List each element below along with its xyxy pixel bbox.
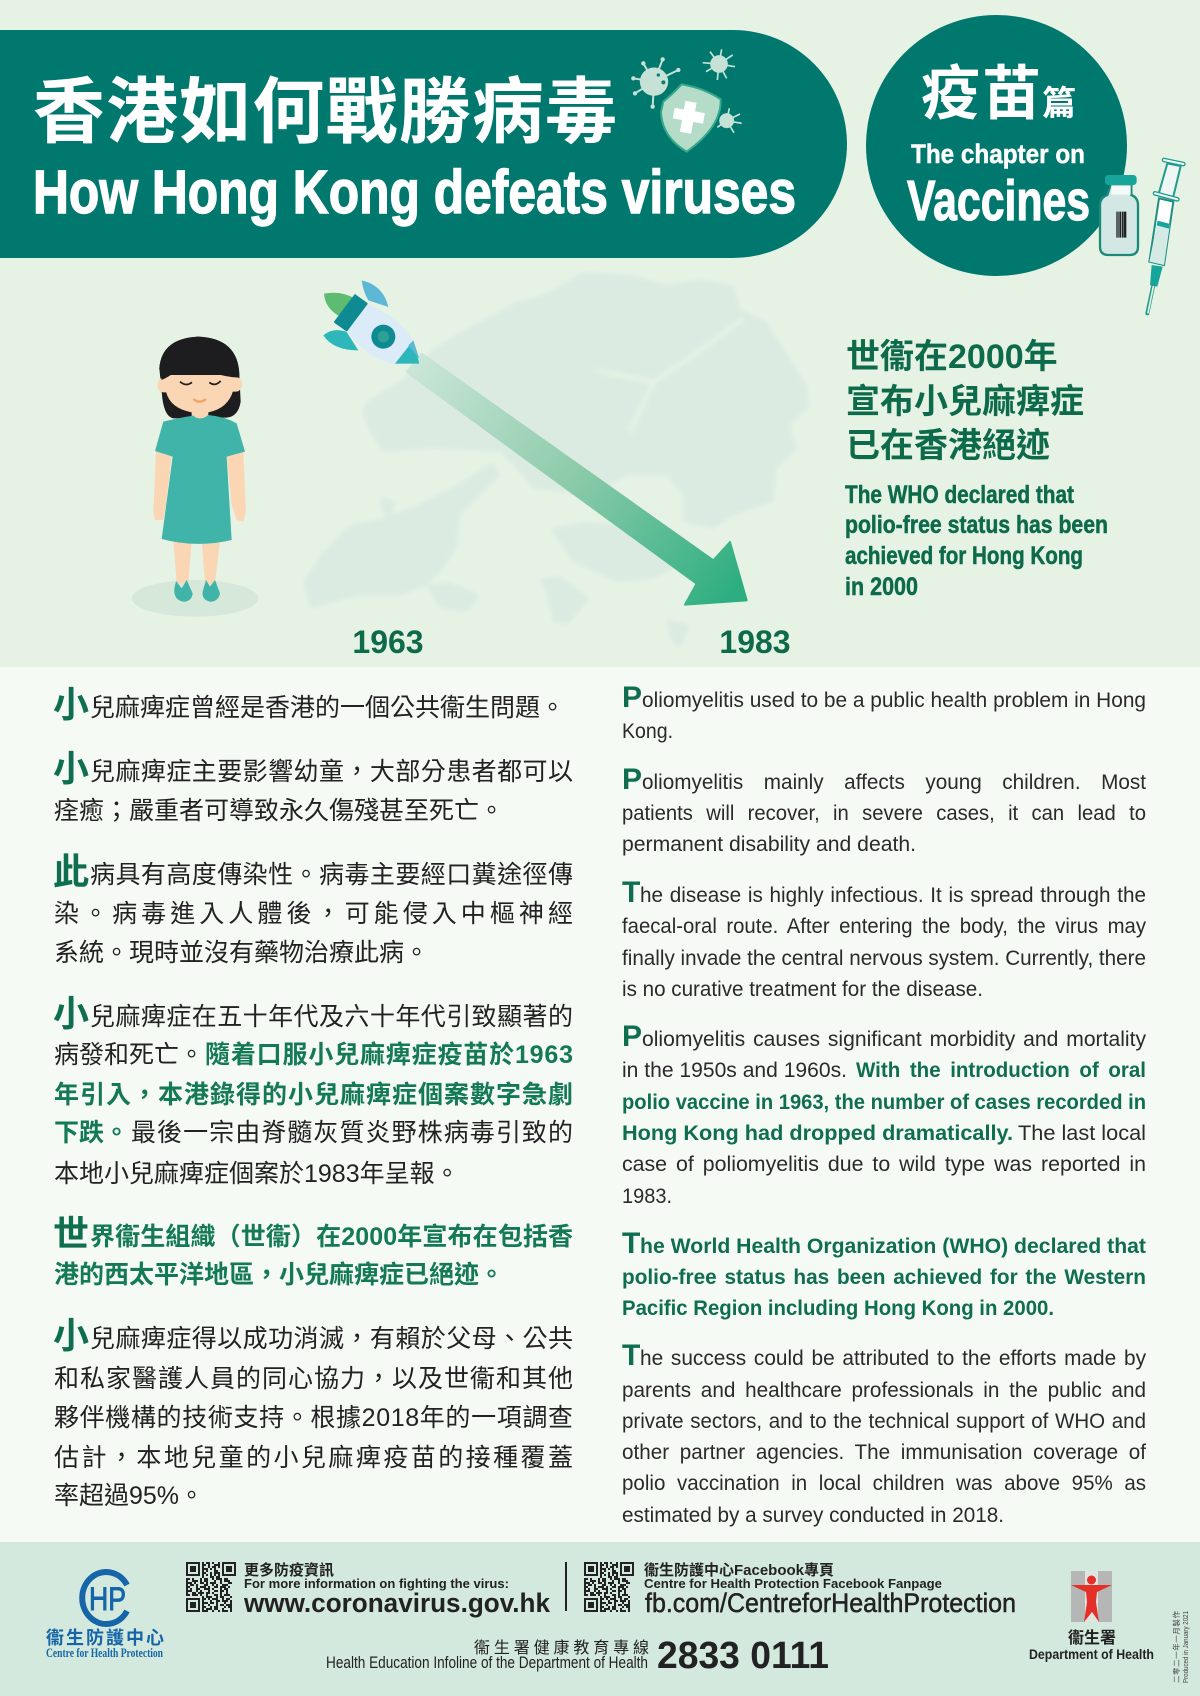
Facebook information: 衞生防護中心Facebook專頁 — [644, 1561, 834, 1579]
shoes — [174, 580, 220, 602]
paragraph 4: P — [622, 1020, 642, 1053]
logo: Centre for Health Protection: 衞生防護中心 — [46, 1627, 164, 1648]
paragraph 6: he success could be attributed to the efforts made by — [640, 1347, 1146, 1370]
paragraph 5: 世 — [53, 1213, 89, 1254]
paragraph 4: 1983. — [622, 1185, 672, 1208]
paragraph 3: 系統。現時並沒有藥物治療此病。 — [54, 939, 429, 967]
icon: rocket — [323, 280, 419, 365]
year label 1963: 1963 — [352, 624, 424, 660]
website information — [243, 1561, 551, 1618]
logo: Centre for Health Protection — [46, 1572, 164, 1660]
background: upper section — [0, 0, 1200, 667]
callout: polio-free declaration — [845, 338, 1108, 601]
Chinese text column — [53, 684, 573, 1510]
badge heading: vaccines in Chinese: 疫苗 — [921, 61, 1041, 127]
paragraph 3 — [622, 876, 1146, 1001]
health education infoline: 2833 0111 — [657, 1635, 829, 1677]
logo: Department of Health: Department of Health — [1029, 1647, 1154, 1662]
paragraph 4 — [53, 993, 573, 1188]
paragraph 6: parents and healthcare professionals in the public and — [622, 1379, 1146, 1402]
virus: lower — [717, 108, 742, 133]
ears — [157, 377, 242, 392]
paragraph 2 — [622, 763, 1146, 856]
callout heading Chinese — [846, 338, 1084, 465]
paragraph 6: 率超過95%。 — [54, 1482, 204, 1510]
paragraph 5 — [622, 1227, 1146, 1320]
paragraph 2: oliomyelitis mainly affects young children. Most — [642, 771, 1146, 794]
callout heading Chinese: 世衞在2000年 — [846, 338, 1058, 376]
paragraph 6: T — [622, 1339, 640, 1372]
paragraph 3: T — [622, 876, 640, 909]
paragraph 2: 小 — [53, 748, 89, 789]
paragraph 6: polio vaccination in local children was above 95% as — [622, 1472, 1146, 1495]
paragraph 4: 隨着口服小兒麻痺症疫苗於1963 — [205, 1040, 573, 1069]
paragraph 4: polio vaccine in 1963, the number of cases recorded in — [622, 1091, 1146, 1114]
paragraph 3: 此 — [53, 851, 89, 892]
paragraph 4: Hong Kong had dropped dramatically. — [622, 1122, 1013, 1145]
paragraph 6: other partner agencies. The immunisation coverage of — [622, 1441, 1146, 1464]
paragraph 6: private sectors, and to the technical support of WHO and — [622, 1410, 1146, 1433]
plus sign — [671, 99, 706, 135]
paragraph 4: 最後一宗由脊髓灰質炎野株病毒引致的 — [131, 1119, 573, 1147]
paragraph 3 — [53, 851, 573, 967]
QR code: coronavirus website — [186, 1563, 236, 1611]
paragraph 3: 染。病毒進入人體後，可能侵入中樞神經 — [54, 900, 573, 928]
paragraph 4: 本地小兒麻痺症個案於1983年呈報。 — [54, 1160, 460, 1188]
paragraph 5: polio-free status has been achieved for the Western — [622, 1266, 1146, 1289]
health education infoline: Health Education Infoline of the Department of Health — [326, 1653, 648, 1672]
title: Chinese: 香港如何戰勝病毒 — [33, 73, 617, 153]
production note: 二零二一年一月製作 — [1171, 1610, 1181, 1683]
Facebook information: Centre for Health Protection Facebook Fanpage — [644, 1577, 942, 1591]
website information: www.coronavirus.gov.hk — [243, 1588, 551, 1618]
paragraph 3: faecal-oral route. After entering the body, the virus may — [622, 915, 1146, 938]
title: English: How Hong Kong defeats viruses — [33, 158, 796, 226]
logo: Centre for Health Protection: Centre for Health Protection — [46, 1646, 163, 1660]
health education infoline: 衞生署健康教育專線 — [474, 1638, 649, 1657]
paragraph 3: 病具有高度傳染性。病毒主要經口糞途徑傳 — [90, 861, 573, 889]
background: body text section — [0, 667, 1200, 1542]
callout text English: The WHO declared that — [845, 481, 1075, 509]
paragraph 4: 病發和死亡。 — [54, 1041, 204, 1069]
fringe — [159, 337, 239, 380]
paragraph 4: oliomyelitis causes significant morbidity and mortality — [642, 1028, 1147, 1051]
paragraph 1 — [622, 681, 1146, 743]
girl illustration — [132, 337, 258, 617]
paragraph 4: 小 — [53, 993, 89, 1034]
callout text English: in 2000 — [845, 573, 918, 601]
paragraph 2: patients will recover, in severe cases, it can lead to — [622, 802, 1146, 825]
paragraph 5 — [53, 1213, 573, 1289]
website information: For more information on fighting the virus: — [244, 1577, 509, 1591]
paragraph 3: finally invade the central nervous system. Currently, there — [622, 947, 1146, 970]
paragraph 6 — [53, 1315, 573, 1510]
logo: Department of Health — [1029, 1571, 1154, 1662]
paragraph 5: he World Health Organization (WHO) declared that — [640, 1235, 1146, 1258]
paragraph 4: in the 1950s and 1960s. — [622, 1059, 847, 1082]
paragraph 4: The last local — [1018, 1122, 1146, 1145]
paragraph 5: Pacific Region including Hong Kong in 2000. — [622, 1297, 1054, 1320]
callout text English — [845, 481, 1108, 601]
virus: upper — [703, 49, 735, 80]
paragraph 2: 痊癒；嚴重者可導致永久傷殘甚至死亡。 — [54, 797, 504, 825]
callout text English: achieved for Hong Kong — [845, 542, 1083, 570]
hair — [159, 337, 241, 418]
eyes and mouth — [180, 381, 221, 385]
paragraph 6: 兒麻痺症得以成功消滅，有賴於父母、公共 — [90, 1325, 573, 1353]
icon: shield and viruses — [631, 49, 742, 152]
production note — [1171, 1610, 1190, 1683]
paragraph 4: 下跌。 — [54, 1119, 129, 1147]
paragraph 6: 和私家醫護人員的同心協力，以及世衞和其他 — [54, 1365, 573, 1393]
arrow: decline from 1963 to 1983 — [407, 354, 747, 605]
website information: 更多防疫資訊 — [244, 1561, 334, 1579]
paragraph 4: 年引入，本港錄得的小兒麻痺症個案數字急劇 — [54, 1080, 573, 1109]
paragraph 4: 兒麻痺症在五十年代及六十年代引致顯著的 — [90, 1003, 573, 1031]
paragraph 1 — [53, 684, 565, 725]
icon: vaccine vial — [1100, 175, 1138, 255]
paragraph 1: 小 — [53, 684, 89, 725]
paragraph 2: P — [622, 763, 642, 796]
footer — [0, 1542, 1200, 1696]
Facebook information — [644, 1561, 1016, 1618]
paragraph 1: 兒麻痺症曾經是香港的一個公共衞生問題。 — [90, 694, 565, 722]
paragraph 5: T — [622, 1227, 640, 1260]
year label 1983: 1983 — [719, 624, 791, 660]
logo: Centre for Health Protection: HP — [89, 1581, 126, 1617]
virus: large — [631, 57, 680, 109]
paragraph 6: 夥伴機構的技術支持。根據2018年的一項調查 — [54, 1404, 573, 1432]
paragraph 6: 小 — [53, 1315, 89, 1356]
paragraph 6: 估計，本地兒童的小兒麻痺疫苗的接種覆蓋 — [54, 1444, 573, 1472]
paragraph 4: With the introduction of oral — [856, 1059, 1146, 1082]
paragraph 6 — [622, 1339, 1146, 1527]
QR code: Facebook page — [584, 1563, 634, 1611]
paragraph 3: he disease is highly infectious. It is spread through the — [640, 884, 1146, 907]
badge line: the chapter on: The chapter on — [911, 139, 1085, 169]
logo: Department of Health: 衞生署 — [1068, 1629, 1116, 1647]
title banner — [0, 30, 847, 258]
dress — [155, 415, 245, 544]
paragraph 1: P — [622, 681, 642, 714]
English text column — [622, 681, 1147, 1527]
badge suffix: 篇 — [1042, 85, 1076, 123]
shield — [661, 84, 721, 152]
paragraph 5: 界衞生組織（世衞）在2000年宣布在包括香 — [90, 1223, 573, 1251]
callout heading Chinese: 宣布小兒麻痺症 — [846, 383, 1084, 421]
paragraph 4: case of poliomyelitis due to wild type was reported in — [622, 1153, 1146, 1176]
face — [166, 375, 233, 422]
map of Hong Kong watermark — [303, 272, 810, 649]
paragraph 6: estimated by a survey conducted in 2018. — [622, 1504, 1004, 1527]
ground shadow — [132, 580, 258, 617]
paragraph 4 — [622, 1020, 1147, 1208]
paragraph 1: oliomyelitis used to be a public health problem in Hong — [642, 689, 1146, 712]
callout heading Chinese: 已在香港絕迹 — [846, 427, 1050, 465]
paragraph 2 — [53, 748, 573, 825]
paragraph 5: 港的西太平洋地區，小兒麻痺症已絕迹。 — [54, 1260, 504, 1289]
production note: Produced in January 2021 — [1181, 1611, 1190, 1683]
icon: syringe — [1147, 160, 1183, 313]
callout text English: polio-free status has been — [845, 511, 1108, 539]
paragraph 3: is no curative treatment for the disease. — [622, 978, 983, 1001]
paragraph 2: permanent disability and death. — [622, 833, 916, 856]
paragraph 1: Kong. — [622, 720, 673, 743]
Facebook information: fb.com/CentreforHealthProtection — [645, 1588, 1016, 1618]
health education infoline — [326, 1635, 829, 1677]
chapter badge — [866, 15, 1127, 276]
arms and legs — [153, 452, 246, 583]
paragraph 2: 兒麻痺症主要影響幼童，大部分患者都可以 — [90, 758, 573, 786]
badge line: vaccines: Vaccines — [907, 169, 1090, 233]
